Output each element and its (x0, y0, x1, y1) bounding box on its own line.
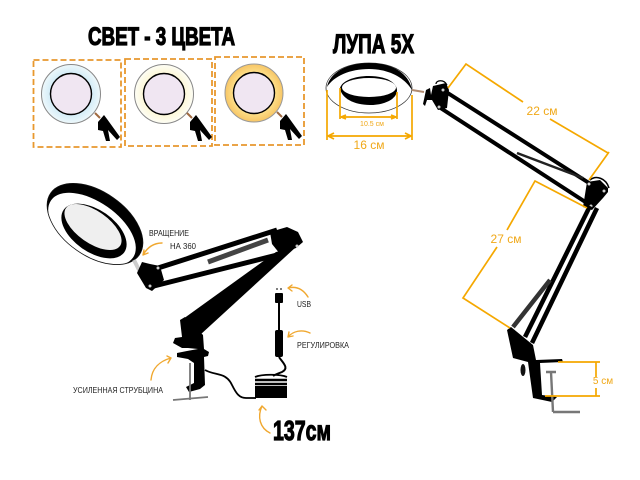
clamp base (507, 327, 563, 402)
dimension: 27 cm: 27 см (491, 232, 521, 246)
cable coil (255, 375, 287, 398)
USB plug (275, 289, 283, 303)
dimension: 22 cm (448, 64, 609, 180)
lamp head (32, 167, 158, 281)
dimension: 10.5 cm: 10.5 см (360, 121, 384, 128)
label: dimmer: РЕГУЛИРОВКА (297, 341, 350, 350)
panel: warm light (215, 57, 304, 145)
panel: three light colours (34, 57, 304, 147)
dimension: 5 cm (545, 362, 613, 396)
arrow: clamp (151, 356, 171, 380)
dimension: 22 cm: 22 см (527, 104, 557, 118)
clamp (173, 317, 209, 392)
dimension: 16 cm: 16 см (354, 138, 384, 152)
arrow: dimmer (288, 331, 310, 337)
lamp head: top view ring (326, 63, 424, 113)
dimension: 16 cm (327, 90, 412, 152)
head joint (137, 262, 164, 291)
arrow: USB (288, 285, 308, 297)
lamp: assembled view (32, 167, 303, 400)
lamp joint (423, 81, 449, 110)
arrow: rotation (143, 243, 162, 255)
label: rotation: НА 360 (170, 242, 197, 251)
label: USB: USB (297, 300, 311, 309)
label: rotation (149, 229, 197, 251)
arrow: cable length (259, 406, 270, 433)
dimmer control (275, 330, 283, 357)
tightening knob (520, 364, 526, 376)
dimension: 5 cm: 5 см (593, 376, 613, 387)
title: magnifier: ЛУПА 5X (333, 29, 414, 59)
label: clamp: УСИЛЕННАЯ СТРУБЦИНА (73, 386, 164, 395)
clamp screw (546, 372, 580, 412)
title: light colours: СВЕТ - 3 ЦВЕТА (88, 23, 235, 51)
dimension: 10.5 cm (340, 88, 397, 128)
lower arm (183, 247, 296, 335)
lower arm (513, 206, 597, 343)
elbow joint (270, 227, 303, 256)
panel: neutral light (125, 59, 212, 146)
clamp screw (173, 363, 208, 400)
upper arm (150, 230, 277, 287)
dimension: 27 cm (463, 181, 587, 328)
elbow joint (583, 178, 609, 210)
label: cable length: 137см (273, 415, 331, 446)
dimmer cable (273, 303, 285, 376)
power cable (205, 370, 256, 398)
lamp arm: side view (423, 81, 609, 412)
upper arm (439, 90, 590, 205)
label: rotation: ВРАЩЕНИЕ (149, 229, 189, 238)
panel: cool light (34, 60, 121, 147)
